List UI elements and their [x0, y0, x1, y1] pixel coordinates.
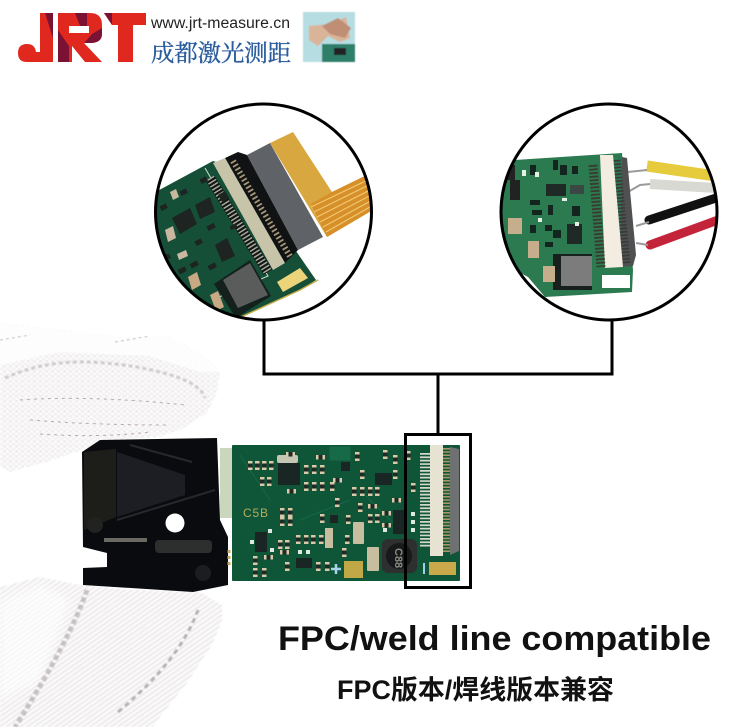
wire: white [650, 184, 716, 188]
PCB board [500, 153, 633, 297]
module diagonal ribs [117, 445, 215, 520]
plus mark [331, 564, 341, 574]
connector black latch [225, 152, 298, 263]
inductor [214, 260, 271, 318]
ICs [375, 473, 392, 485]
highlight box around connector [406, 434, 470, 588]
large capacitors [353, 522, 364, 544]
connector white bar [430, 445, 443, 556]
small components [248, 450, 416, 577]
connector white bar [600, 155, 623, 268]
inductor [382, 539, 417, 573]
gold pads [344, 561, 363, 578]
wire: yellow [647, 166, 716, 176]
connector grey housing [450, 447, 459, 555]
connector teeth right [616, 160, 626, 264]
module trapezoid face [117, 452, 185, 517]
PCB board [150, 161, 316, 322]
english caption: FPC/weld line compatible [278, 620, 711, 658]
module screw bosses [87, 517, 103, 533]
board marking C5B: C5B [243, 506, 268, 520]
connector pins [420, 453, 430, 548]
capacitors [188, 272, 201, 290]
white pad [602, 275, 630, 288]
module silver bar [104, 538, 147, 542]
wire: black [649, 198, 716, 220]
connector pin row underlay [210, 178, 268, 272]
inductor [553, 254, 592, 290]
module pins [228, 550, 230, 568]
connector lines between circles and module [264, 321, 612, 434]
top glove finger [0, 323, 220, 472]
capacitors [508, 218, 522, 234]
ICs [172, 208, 197, 234]
connector gold teeth [233, 161, 291, 258]
green sensor PCB side strip [220, 448, 232, 518]
module hole [166, 514, 184, 532]
panel: FPC version magnified circle [150, 104, 378, 322]
main chip [278, 463, 300, 485]
main PCB: C88 [392, 548, 404, 568]
solder joints [628, 170, 650, 245]
pin 1 mark [423, 563, 425, 574]
chinese caption: FPC版本/焊线版本兼容 [337, 675, 614, 705]
connector gold teeth [443, 448, 450, 553]
bottom glove finger [0, 577, 222, 727]
module left textured block [84, 449, 116, 530]
black laser module housing [82, 438, 229, 592]
module cylinder [155, 540, 212, 553]
panel: weld line version magnified circle [500, 104, 718, 320]
grey FPC stiffener [247, 143, 323, 250]
logo photo: hands assembling board [303, 12, 355, 62]
connector teeth left [593, 165, 601, 267]
wire: red [650, 220, 718, 245]
FPC gold ribbon [270, 132, 378, 237]
main PCB [232, 445, 460, 581]
ICs [546, 184, 566, 196]
website url: www.jrt-measure.cn [150, 15, 290, 32]
company name: 成都激光测距 [151, 40, 291, 67]
gold pad [277, 268, 308, 292]
connector grey housing [620, 157, 636, 267]
connector pin row [210, 178, 268, 272]
logo: JRT [18, 13, 146, 62]
connector white bar [213, 158, 285, 270]
